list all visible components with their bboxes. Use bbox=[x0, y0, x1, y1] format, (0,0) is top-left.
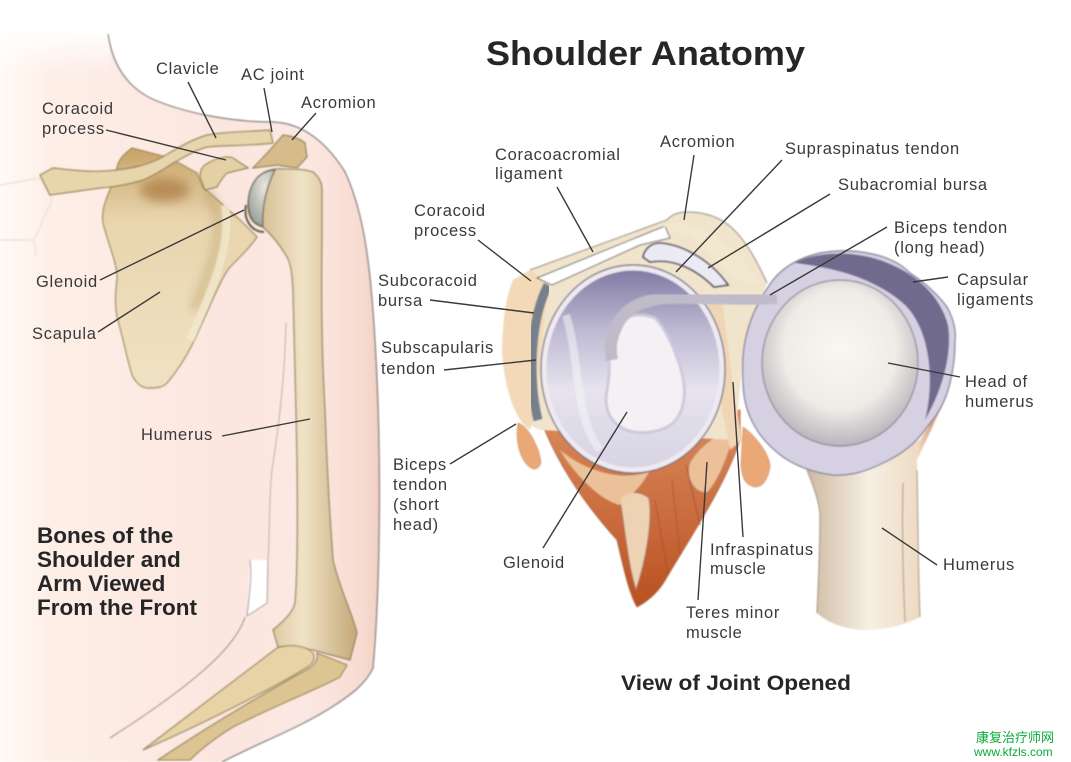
labels and leader lines: joint opened figure: Supraspinatus tendon bbox=[785, 140, 960, 158]
labels and leader lines: left figure: Scapula bbox=[32, 325, 97, 343]
labels and leader lines: joint opened figure: (long head) bbox=[894, 239, 985, 257]
labels and leader lines: joint opened figure bbox=[378, 133, 1034, 642]
heading: bones of the shoulder and arm: Bones of the bbox=[37, 523, 173, 548]
labels and leader lines: joint opened figure: Coracoacromial bbox=[495, 146, 621, 164]
labels and leader lines: joint opened figure: muscle bbox=[686, 624, 743, 642]
title: Shoulder Anatomy bbox=[486, 35, 805, 73]
labels and leader lines: joint opened figure: process bbox=[414, 222, 477, 240]
labels and leader lines: left figure: Glenoid bbox=[36, 273, 98, 291]
labels and leader lines: joint opened figure: Head of bbox=[965, 373, 1028, 391]
labels and leader lines: joint opened figure: Glenoid bbox=[503, 554, 565, 572]
illustration: biceps tendon long head bbox=[611, 298, 777, 360]
labels and leader lines: joint opened figure: Subcoracoid bbox=[378, 272, 478, 290]
labels and leader lines: left figure: Clavicle bbox=[156, 60, 220, 78]
labels and leader lines: joint opened figure: ligament bbox=[495, 165, 563, 183]
illustration: humerus bbox=[245, 169, 357, 660]
labels and leader lines: joint opened figure: Infraspinatus bbox=[710, 541, 814, 559]
labels and leader lines: left figure: Coracoid bbox=[42, 100, 114, 118]
labels and leader lines: left figure: Acromion bbox=[301, 94, 376, 112]
illustration: biceps tendon short head bbox=[517, 423, 770, 487]
labels and leader lines: left figure: process bbox=[42, 120, 105, 138]
heading: bones of the shoulder and arm: Arm Viewed bbox=[37, 571, 165, 596]
labels and leader lines: joint opened figure: head) bbox=[393, 516, 439, 534]
heading: bones of the shoulder and arm: Shoulder and bbox=[37, 547, 181, 572]
watermark bbox=[973, 730, 1054, 759]
labels and leader lines: joint opened figure: Teres minor bbox=[686, 604, 780, 622]
labels and leader lines: joint opened figure: ligaments bbox=[957, 291, 1034, 309]
labels and leader lines: joint opened figure: Coracoid bbox=[414, 202, 486, 220]
labels and leader lines: joint opened figure: humerus bbox=[965, 393, 1034, 411]
illustration: supraspinatus tendon bbox=[643, 243, 728, 287]
labels and leader lines: left figure bbox=[32, 60, 376, 444]
illustration: scapula bbox=[103, 148, 257, 388]
caption: view of joint opened: View of Joint Opened bbox=[621, 672, 851, 695]
labels and leader lines: left figure: AC joint bbox=[241, 66, 305, 84]
labels and leader lines: joint opened figure: (short bbox=[393, 496, 440, 514]
labels and leader lines: joint opened figure: Acromion bbox=[660, 133, 735, 151]
illustration: rotator cuff muscles bbox=[542, 410, 740, 607]
illustration: clavicle and acromion bbox=[40, 130, 307, 195]
illustration: arm and shoulder skin bbox=[0, 30, 379, 762]
labels and leader lines: joint opened figure: Biceps bbox=[393, 456, 447, 474]
illustration: humerus opened view bbox=[743, 251, 955, 630]
illustration: subscapularis tendon bbox=[532, 285, 548, 420]
labels and leader lines: joint opened figure: Humerus bbox=[943, 556, 1015, 574]
illustration: cream capsule behind glenoid bbox=[502, 212, 767, 450]
labels and leader lines: joint opened figure: tendon bbox=[381, 360, 436, 378]
labels and leader lines: joint opened figure: Capsular bbox=[957, 271, 1029, 289]
labels and leader lines: joint opened figure: tendon bbox=[393, 476, 448, 494]
labels and leader lines: joint opened figure: bursa bbox=[378, 292, 423, 310]
heading: bones of the shoulder and arm bbox=[37, 523, 197, 620]
labels and leader lines: joint opened figure: muscle bbox=[710, 560, 767, 578]
labels and leader lines: joint opened figure: Subscapularis bbox=[381, 339, 494, 357]
labels and leader lines: joint opened figure: Biceps tendon bbox=[894, 219, 1008, 237]
illustration: glenoid socket bbox=[541, 265, 725, 473]
labels and leader lines: left figure: Humerus bbox=[141, 426, 213, 444]
labels and leader lines: joint opened figure: Subacromial bursa bbox=[838, 176, 988, 194]
illustration: forearm bones bbox=[143, 646, 347, 760]
watermark: 康复治疗师网 bbox=[976, 730, 1054, 745]
heading: bones of the shoulder and arm: From the Front bbox=[37, 595, 197, 620]
watermark: www.kfzls.com bbox=[973, 745, 1053, 759]
